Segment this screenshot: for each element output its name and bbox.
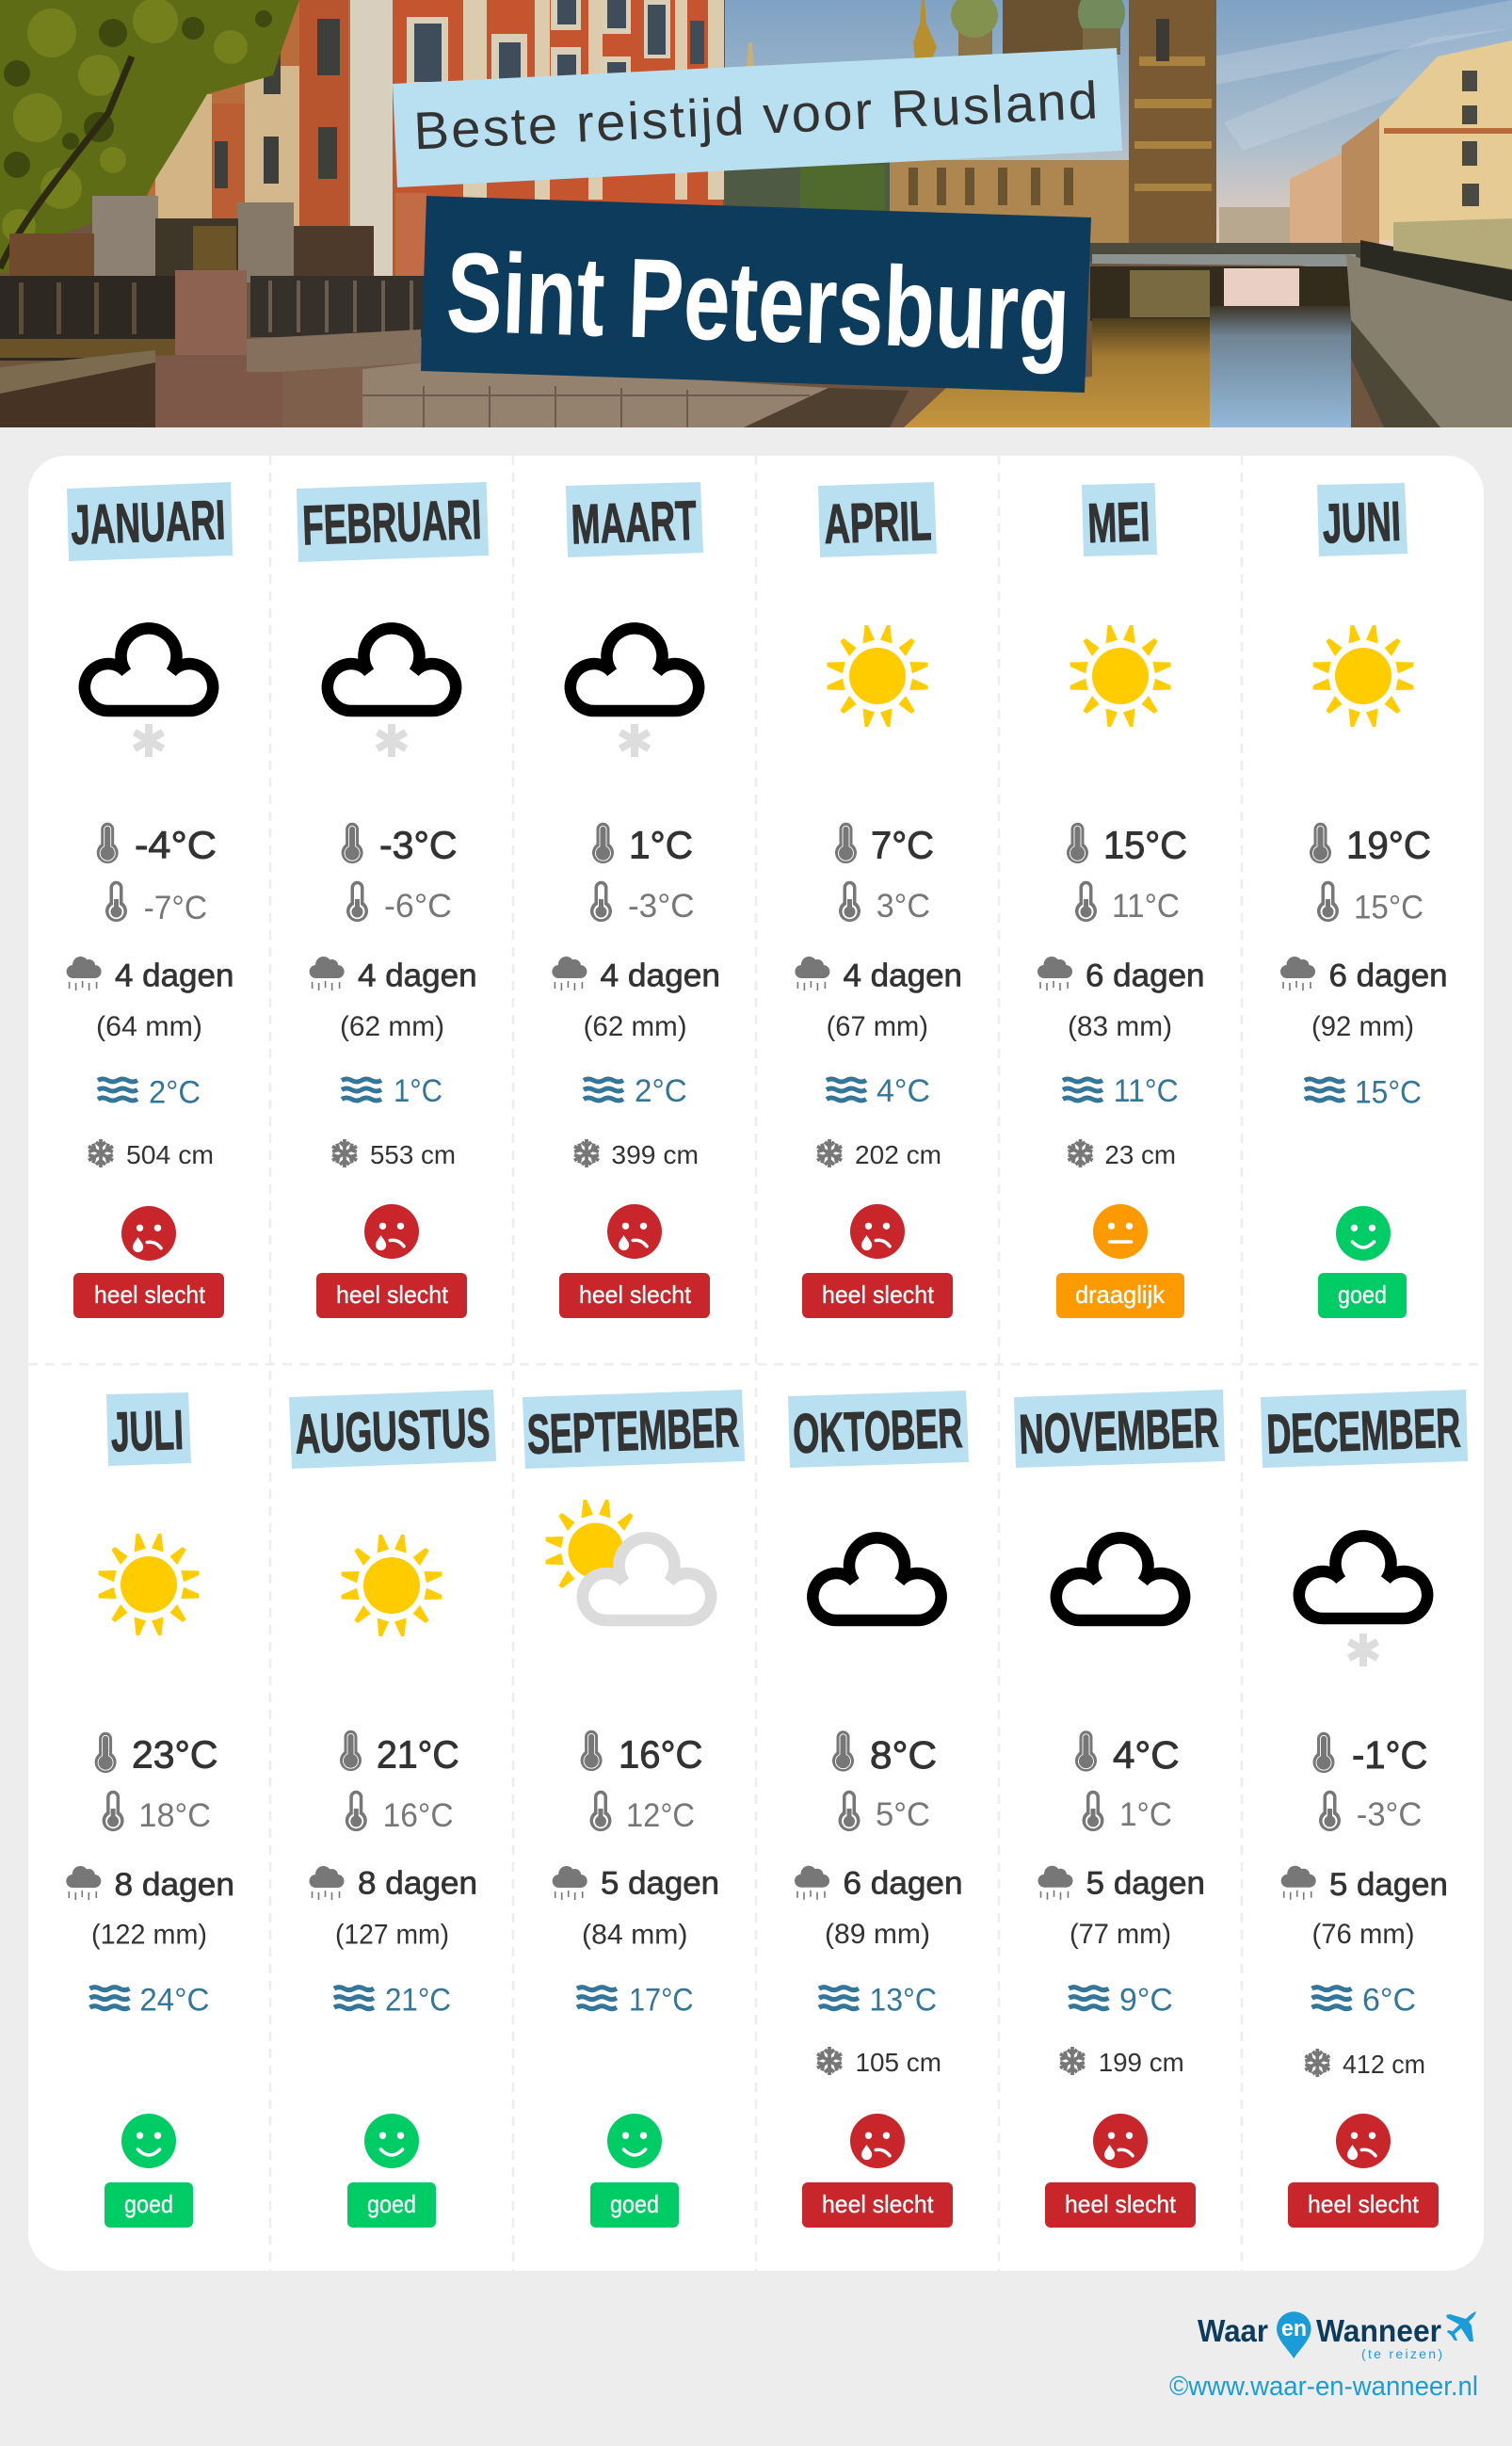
heading bbox=[106, 1392, 191, 1466]
water temperature: 2°C bbox=[635, 1073, 687, 1109]
heading: FEBRUARI bbox=[301, 489, 482, 556]
heading bbox=[1014, 1390, 1225, 1468]
icon: sun behind cloud bbox=[546, 1500, 711, 1620]
rain days bbox=[1037, 1866, 1205, 1902]
logo: Waar en Wanneer: Wanneer bbox=[1316, 2313, 1441, 2348]
water temperature bbox=[1063, 1073, 1179, 1109]
month: juli bbox=[66, 1392, 234, 2228]
logo: Waar en Wanneer: Waar bbox=[1198, 2313, 1268, 2348]
month: oktober bbox=[788, 1391, 969, 2228]
main card bbox=[28, 456, 1484, 2271]
water temperature bbox=[1070, 1983, 1173, 2019]
min temperature bbox=[1083, 1791, 1172, 1833]
rain days: 5 dagen bbox=[1329, 1867, 1448, 1903]
month: februari bbox=[297, 482, 489, 1318]
title banner: Sint Petersburg bbox=[444, 229, 1071, 376]
rainfall: (127 mm) bbox=[335, 1919, 449, 1950]
heading bbox=[788, 1391, 969, 1468]
snow depth: 105 cm bbox=[855, 2048, 941, 2077]
min temperature: -3°C bbox=[1357, 1796, 1422, 1833]
snow depth bbox=[330, 1139, 456, 1169]
max temperature bbox=[835, 823, 934, 867]
heading bbox=[1317, 483, 1407, 556]
rating bbox=[105, 2114, 193, 2228]
subtitle banner bbox=[393, 48, 1122, 187]
month: april bbox=[795, 482, 962, 1318]
rainfall: (84 mm) bbox=[582, 1919, 687, 1950]
water temperature: 1°C bbox=[394, 1073, 442, 1109]
min temperature bbox=[590, 881, 695, 925]
snow depth: 23 cm bbox=[1104, 1140, 1176, 1169]
month: juni bbox=[1280, 483, 1448, 1318]
icon: cloud bbox=[812, 1537, 941, 1620]
rating bbox=[802, 2114, 953, 2228]
rain days bbox=[310, 957, 477, 994]
water temperature: 6°C bbox=[1362, 1983, 1416, 2019]
icon: snow cloud bbox=[571, 628, 699, 757]
rainfall: (92 mm) bbox=[1311, 1011, 1414, 1042]
logo: Waar en Wanneer: en bbox=[1281, 2316, 1307, 2341]
heading bbox=[289, 1390, 496, 1469]
snow depth: 202 cm bbox=[855, 1140, 941, 1169]
max temperature bbox=[95, 1732, 217, 1777]
max temperature: 7°C bbox=[871, 824, 934, 867]
max temperature: 4°C bbox=[1113, 1733, 1180, 1777]
min temperature: 5°C bbox=[876, 1796, 930, 1833]
rating: goed bbox=[1338, 1280, 1387, 1309]
min temperature: 18°C bbox=[138, 1797, 211, 1834]
rating: heel slecht bbox=[822, 1280, 935, 1309]
snow depth: 504 cm bbox=[126, 1140, 214, 1169]
water temperature: 24°C bbox=[139, 1983, 209, 2019]
min temperature: -6°C bbox=[384, 888, 452, 925]
title banner bbox=[421, 196, 1091, 393]
rating bbox=[1288, 2114, 1439, 2228]
water temperature bbox=[334, 1983, 451, 2019]
rating: goed bbox=[367, 2190, 416, 2218]
heading: AUGUSTUS bbox=[294, 1396, 491, 1466]
snow depth bbox=[815, 1139, 941, 1169]
icon: snow cloud bbox=[1299, 1536, 1427, 1666]
min temperature bbox=[103, 1791, 211, 1834]
rain days: 5 dagen bbox=[601, 1866, 719, 1902]
min temperature bbox=[839, 881, 930, 925]
rain days: 8 dagen bbox=[358, 1866, 477, 1902]
max temperature bbox=[342, 823, 458, 867]
heading bbox=[523, 1390, 745, 1469]
rating: heel slecht bbox=[1308, 2190, 1420, 2218]
max temperature bbox=[97, 823, 217, 867]
water temperature bbox=[819, 1983, 937, 2019]
month: maart bbox=[552, 482, 720, 1318]
min temperature bbox=[838, 1791, 930, 1833]
rainfall: (89 mm) bbox=[825, 1919, 930, 1950]
snow depth bbox=[1303, 2049, 1425, 2079]
rain days: 4 dagen bbox=[844, 958, 962, 994]
water temperature: 9°C bbox=[1119, 1983, 1173, 2019]
min temperature: 3°C bbox=[877, 888, 930, 925]
min temperature bbox=[346, 1791, 454, 1834]
snow depth bbox=[1058, 2047, 1184, 2077]
month: september bbox=[523, 1390, 745, 2228]
water temperature: 4°C bbox=[877, 1073, 930, 1109]
max temperature bbox=[1067, 823, 1187, 867]
water temperature bbox=[584, 1073, 687, 1109]
rainfall: (83 mm) bbox=[1068, 1011, 1172, 1042]
water temperature bbox=[98, 1075, 201, 1111]
icon: snow cloud bbox=[85, 628, 213, 757]
min temperature: 1°C bbox=[1119, 1796, 1172, 1833]
snow depth bbox=[87, 1139, 214, 1169]
rating: draaglijk bbox=[1075, 1280, 1166, 1309]
heading: APRIL bbox=[823, 490, 932, 555]
month: december bbox=[1261, 1390, 1468, 2228]
rating bbox=[347, 2114, 436, 2228]
water temperature: 13°C bbox=[869, 1983, 937, 2019]
rain days bbox=[1280, 957, 1448, 994]
icon: sun bbox=[342, 1535, 442, 1636]
icon: cloud bbox=[1056, 1537, 1184, 1620]
heading: NOVEMBER bbox=[1018, 1396, 1219, 1466]
max temperature: 23°C bbox=[132, 1733, 218, 1777]
rain days bbox=[553, 1866, 719, 1902]
rain days: 4 dagen bbox=[601, 958, 720, 994]
max temperature: 16°C bbox=[619, 1733, 702, 1777]
logo: Waar en Wanneer: (te reizen) bbox=[1361, 2346, 1442, 2361]
rain days: 6 dagen bbox=[844, 1866, 962, 1902]
rating: heel slecht bbox=[1065, 2190, 1177, 2218]
website url: ©www.waar-en-wanneer.nl bbox=[1169, 2372, 1478, 2402]
rain days bbox=[1281, 1866, 1448, 1903]
logo: Waar en Wanneer bbox=[1198, 2311, 1476, 2361]
max temperature bbox=[581, 1730, 702, 1777]
max temperature bbox=[832, 1730, 937, 1777]
min temperature bbox=[1319, 1791, 1422, 1833]
icon: sun bbox=[1070, 625, 1170, 727]
max temperature: -4°C bbox=[135, 824, 217, 867]
max temperature: 1°C bbox=[629, 824, 693, 867]
max temperature bbox=[340, 1730, 459, 1777]
month: mei bbox=[1037, 483, 1205, 1318]
heading: MEI bbox=[1086, 491, 1150, 555]
min temperature bbox=[1075, 881, 1180, 925]
icon: map pin bbox=[1277, 2311, 1311, 2358]
rating: goed bbox=[124, 2190, 173, 2218]
rainfall: (122 mm) bbox=[91, 1919, 207, 1950]
rain days bbox=[67, 957, 233, 994]
icon: airplane bbox=[1446, 2311, 1476, 2341]
max temperature bbox=[1075, 1730, 1180, 1777]
water temperature: 21°C bbox=[385, 1983, 451, 2019]
icon: sun bbox=[1313, 625, 1413, 727]
heading bbox=[67, 482, 233, 561]
rating bbox=[1318, 1206, 1407, 1318]
icon: sun bbox=[828, 625, 927, 727]
water temperature bbox=[90, 1983, 209, 2019]
max temperature: 8°C bbox=[870, 1733, 937, 1777]
rain days bbox=[309, 1866, 477, 1902]
rain days: 5 dagen bbox=[1086, 1866, 1205, 1902]
rain days bbox=[552, 957, 720, 994]
heading bbox=[566, 482, 703, 557]
rating: heel slecht bbox=[94, 1280, 206, 1309]
rating bbox=[559, 1204, 710, 1318]
rainfall: (62 mm) bbox=[340, 1011, 444, 1042]
max temperature: -3°C bbox=[379, 824, 458, 867]
water temperature: 11°C bbox=[1114, 1073, 1179, 1109]
min temperature: 16°C bbox=[383, 1797, 454, 1834]
subtitle banner: Beste reistijd voor Rusland bbox=[412, 71, 1099, 160]
month: januari bbox=[67, 482, 233, 1318]
snow depth bbox=[1066, 1139, 1176, 1169]
min temperature: 12°C bbox=[626, 1797, 695, 1834]
header photo: Saint Petersburg canal and church bbox=[0, 0, 1512, 427]
heading: OKTOBER bbox=[792, 1397, 963, 1465]
rainfall: (76 mm) bbox=[1312, 1919, 1414, 1950]
max temperature: 15°C bbox=[1103, 824, 1187, 867]
rainfall: (64 mm) bbox=[96, 1011, 202, 1042]
rain days bbox=[66, 1866, 234, 1903]
month: augustus bbox=[289, 1390, 496, 2228]
rainfall: (77 mm) bbox=[1070, 1919, 1171, 1950]
water temperature: 2°C bbox=[149, 1075, 201, 1111]
min temperature: -7°C bbox=[144, 890, 207, 926]
heading: SEPTEMBER bbox=[526, 1396, 740, 1466]
min temperature: -3°C bbox=[628, 888, 695, 925]
snow depth: 553 cm bbox=[370, 1140, 456, 1169]
rain days bbox=[795, 1866, 962, 1902]
min temperature: 15°C bbox=[1354, 889, 1424, 925]
rating: heel slecht bbox=[336, 1280, 449, 1309]
rain days: 4 dagen bbox=[115, 958, 233, 994]
heading bbox=[818, 482, 937, 557]
water temperature bbox=[827, 1073, 930, 1109]
rain days: 6 dagen bbox=[1086, 958, 1205, 994]
snow depth bbox=[572, 1139, 699, 1169]
icon: sun bbox=[99, 1534, 199, 1635]
snow depth bbox=[815, 2047, 941, 2077]
max temperature: 21°C bbox=[377, 1733, 459, 1777]
rain days bbox=[795, 957, 962, 994]
rating bbox=[73, 1206, 224, 1318]
rating bbox=[802, 1204, 953, 1318]
max temperature: 19°C bbox=[1346, 824, 1431, 867]
rating bbox=[1056, 1204, 1184, 1318]
heading: JANUARI bbox=[70, 489, 226, 556]
min temperature bbox=[346, 881, 452, 925]
rainfall: (67 mm) bbox=[827, 1011, 928, 1042]
snow depth: 412 cm bbox=[1343, 2050, 1425, 2079]
heading bbox=[1082, 483, 1157, 556]
rain days: 4 dagen bbox=[358, 958, 477, 994]
water temperature bbox=[342, 1073, 442, 1109]
max temperature: -1°C bbox=[1352, 1733, 1427, 1777]
heading: MAART bbox=[571, 490, 698, 555]
water temperature: 17°C bbox=[629, 1983, 693, 2019]
water temperature bbox=[1312, 1983, 1416, 2019]
rain days: 8 dagen bbox=[115, 1867, 234, 1903]
min temperature bbox=[1317, 881, 1424, 925]
rain days bbox=[1037, 957, 1205, 994]
max temperature bbox=[592, 823, 693, 867]
rating: heel slecht bbox=[579, 1280, 692, 1309]
max temperature bbox=[1312, 1732, 1427, 1777]
icon: snow cloud bbox=[328, 628, 456, 757]
snow depth: 399 cm bbox=[611, 1140, 699, 1169]
min temperature bbox=[105, 881, 207, 926]
heading: JUNI bbox=[1322, 491, 1402, 555]
rainfall: (62 mm) bbox=[584, 1011, 687, 1042]
heading: JULI bbox=[110, 1399, 185, 1463]
water temperature bbox=[577, 1983, 693, 2019]
heading bbox=[297, 482, 489, 562]
max temperature bbox=[1310, 823, 1431, 867]
rating: goed bbox=[610, 2190, 659, 2218]
min temperature: 11°C bbox=[1112, 888, 1180, 925]
water temperature: 15°C bbox=[1355, 1075, 1422, 1111]
rating bbox=[1045, 2114, 1196, 2228]
rating: heel slecht bbox=[822, 2190, 934, 2218]
min temperature bbox=[589, 1791, 695, 1834]
rating bbox=[590, 2114, 679, 2228]
rain days: 6 dagen bbox=[1329, 958, 1448, 994]
month: november bbox=[1014, 1390, 1225, 2228]
rating bbox=[316, 1204, 467, 1318]
snow depth: 199 cm bbox=[1099, 2048, 1184, 2077]
water temperature bbox=[1305, 1075, 1422, 1111]
